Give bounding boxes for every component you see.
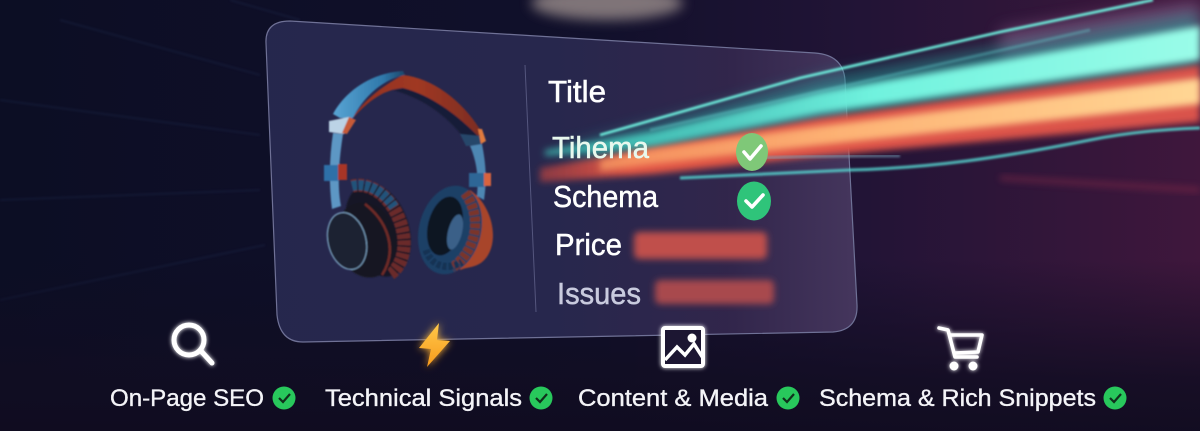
redacted issues bar	[655, 280, 774, 304]
feature: Schema & Rich Snippets	[819, 328, 1126, 412]
card divider	[525, 65, 536, 312]
lower teal beam	[680, 128, 1200, 178]
icon: cart	[939, 328, 982, 370]
icon: Tihema check	[736, 133, 768, 171]
icon: headphones	[322, 71, 493, 285]
check badge	[272, 386, 296, 410]
label: On-Page SEO: On-Page SEO	[110, 385, 264, 412]
icon: lightning bolt	[419, 323, 450, 367]
icon: magnifier	[174, 325, 212, 363]
field rows	[548, 74, 659, 311]
icon: image	[663, 328, 703, 366]
icon: Schema check	[737, 182, 771, 220]
redacted price bar	[634, 232, 767, 259]
field: Issues: Issues	[557, 276, 641, 311]
glow: red	[540, 65, 1200, 182]
secondary teal streak	[650, 30, 1090, 130]
headband	[324, 71, 491, 209]
label: Content & Media: Content & Media	[578, 385, 769, 412]
glow: teal	[560, 12, 1200, 160]
right ear cup	[409, 179, 493, 281]
thin teal beam	[600, 0, 1153, 135]
check badge	[776, 386, 800, 410]
check badge	[1104, 386, 1126, 410]
glass product card	[266, 0, 1200, 342]
orange beam	[600, 78, 1200, 171]
check badge	[530, 386, 552, 410]
field: Tihema: Tihema	[552, 130, 650, 165]
label: Schema & Rich Snippets: Schema & Rich Snippets	[819, 385, 1096, 412]
blurred top smudge	[531, 0, 683, 20]
wide teal beam	[545, 26, 1200, 156]
light beams	[540, 0, 1200, 182]
feature: On-Page SEO	[110, 325, 296, 412]
field: Title: Title	[548, 74, 606, 109]
field: Schema: Schema	[553, 179, 659, 214]
field: Price: Price	[555, 227, 622, 262]
left ear cup	[322, 175, 422, 285]
label: Technical Signals: Technical Signals	[325, 385, 522, 412]
feature: Technical Signals	[325, 323, 552, 412]
feature: Content & Media	[578, 328, 800, 412]
